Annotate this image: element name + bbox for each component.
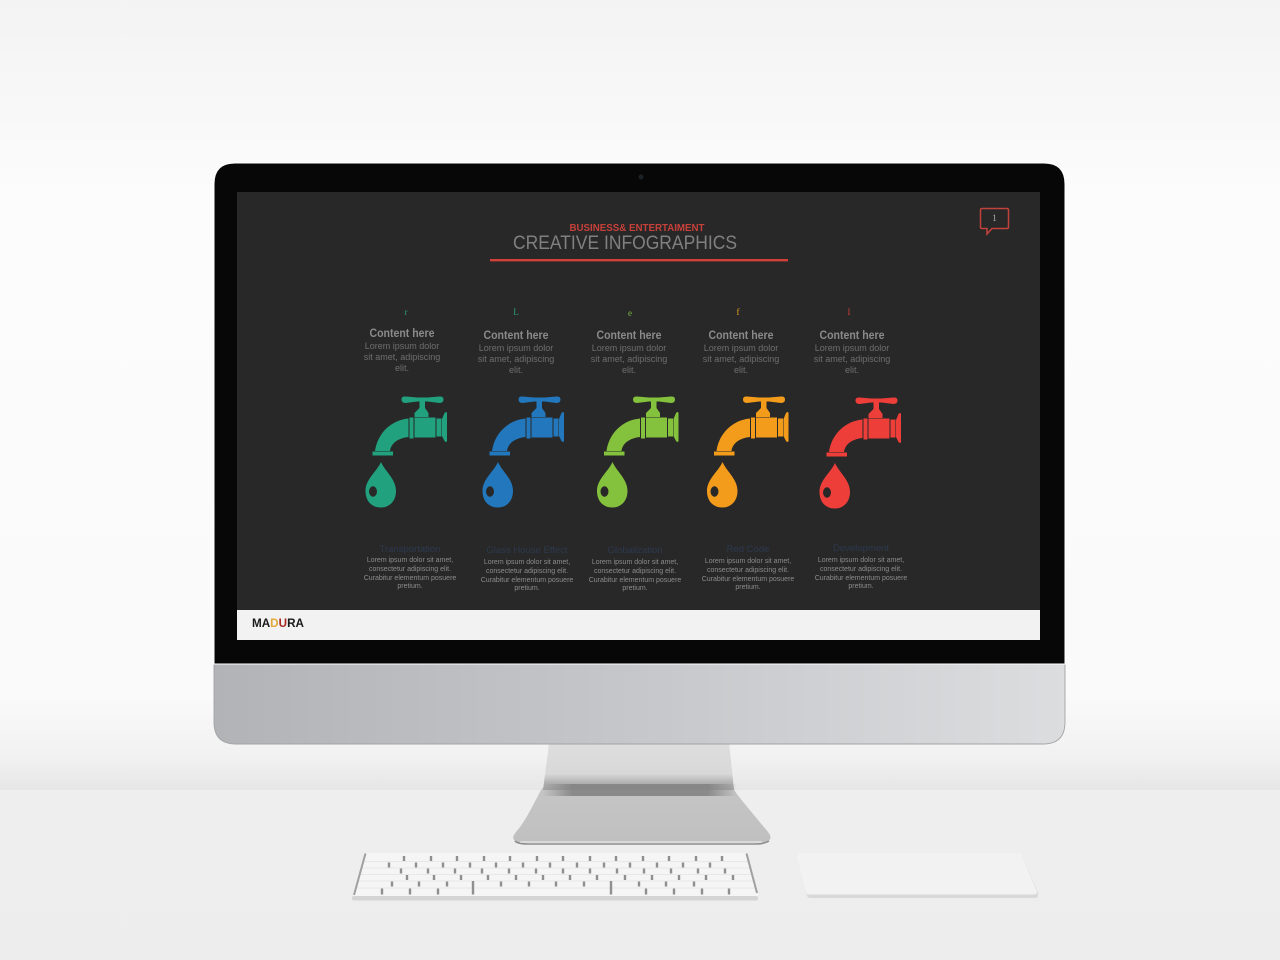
bottom text [481,545,573,592]
bottom text: pretium. [622,585,648,592]
icon: page number bubble [980,208,1008,234]
top text: Content here [820,330,884,342]
monitor bezel [214,163,1065,664]
top text: sit amet, adipiscing [364,352,440,362]
icon: orange faucet and drop [707,396,788,508]
slide footer [237,610,1040,640]
letter: e [628,308,632,318]
top text [591,330,667,375]
bottom text: consectetur adipiscing elit. [369,566,451,573]
top text: elit. [845,365,859,375]
top text: Content here [596,330,662,342]
bottom text: Lorem ipsum dolor sit amet, [484,559,570,566]
bottom text: Curabitur elementum posuere [589,577,681,584]
bottom text [815,543,907,590]
monitor chin [214,660,1065,744]
column 3: Globalization [589,308,681,592]
bottom text: pretium. [397,583,423,590]
bottom text: Red Code [727,544,769,555]
top text: Lorem ipsum dolor [592,343,666,353]
letter: l [848,307,851,317]
top text [814,330,890,375]
icon: red faucet and drop [820,397,901,508]
bottom text: Lorem ipsum dolor sit amet, [818,557,904,564]
bottom text: consectetur adipiscing elit. [594,568,676,575]
letter: r [404,307,408,317]
top text: Lorem ipsum dolor [365,341,439,351]
eyebrow heading: BUSINESS& ENTERTAIMENT [570,222,705,234]
slide background [237,192,1040,610]
bottom text: Lorem ipsum dolor sit amet, [705,558,791,565]
webcam [638,174,644,180]
bottom text: Curabitur elementum posuere [481,577,573,584]
bottom text: Lorem ipsum dolor sit amet, [367,557,453,564]
top text: Lorem ipsum dolor [479,343,553,353]
top text: elit. [622,365,636,375]
top text [703,330,779,375]
bottom text [589,545,681,592]
icon: lime faucet and drop [597,396,678,508]
top text: sit amet, adipiscing [814,354,890,364]
bottom text [702,544,794,591]
desk surface [0,790,1280,960]
bottom text: Development [833,543,889,554]
top text [478,330,554,375]
bottom text: Curabitur elementum posuere [815,575,907,582]
top text: elit. [509,365,523,375]
bottom text: pretium. [514,585,540,592]
title underline [490,259,788,261]
top text: sit amet, adipiscing [591,354,667,364]
top text: elit. [734,365,748,375]
icon: page number bubble: 1 [992,214,997,224]
monitor stand [513,744,770,844]
bottom text: pretium. [848,583,874,590]
logo: MADURA [252,618,304,630]
bottom text: pretium. [735,584,761,591]
monitor [214,163,1065,744]
bottom text: Glass House Effect [486,545,568,556]
top text: sit amet, adipiscing [703,354,779,364]
letter: L [513,307,519,317]
top text: Content here [370,328,434,340]
letter: f [736,307,740,317]
top text: elit. [395,363,409,373]
top text [364,328,440,373]
column 1: Transportation [364,307,456,590]
bottom text: Globalization [608,545,662,556]
keyboard [352,853,758,900]
top text: Content here [484,330,548,342]
top text: Content here [708,330,774,342]
top text: sit amet, adipiscing [478,354,554,364]
title block [490,222,788,261]
column 2: Glass House Effect [478,307,573,592]
bottom text: consectetur adipiscing elit. [486,568,568,575]
bottom text: Transportation [380,544,440,555]
icon: blue faucet and drop [482,396,564,508]
bottom text [364,544,456,590]
bottom text: consectetur adipiscing elit. [820,566,902,573]
top text: Lorem ipsum dolor [704,343,778,353]
top text: Lorem ipsum dolor [815,343,889,353]
main heading: CREATIVE INFOGRAPHICS [513,233,737,254]
bottom text: Lorem ipsum dolor sit amet, [592,559,678,566]
column 4: Red Code [702,307,794,591]
column 5: Development [814,307,907,590]
trackpad [797,853,1038,898]
bottom text: Curabitur elementum posuere [702,576,794,583]
bottom text: Curabitur elementum posuere [364,575,456,582]
bottom text: consectetur adipiscing elit. [707,567,789,574]
icon: green faucet and drop [366,396,447,508]
